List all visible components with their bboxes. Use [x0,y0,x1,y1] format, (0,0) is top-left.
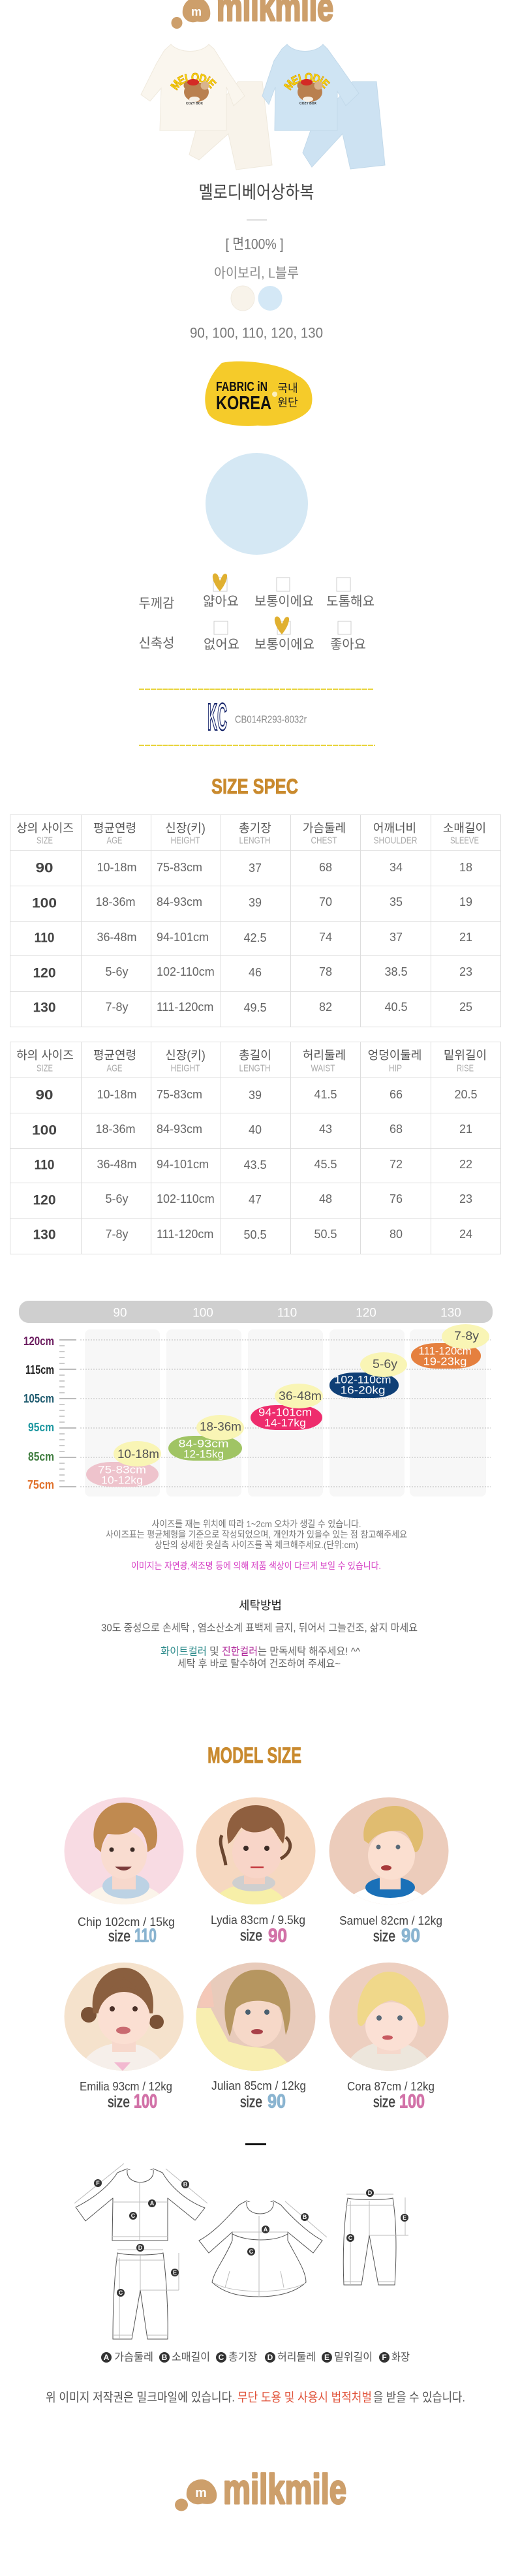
top table rows: 78 [319,965,332,978]
height axis labels: 120cm [23,1335,54,1348]
washing instructions: 세탁방법 [239,1599,282,1612]
bottom table rows: 40 [249,1123,262,1136]
top table rows: 40.5 [384,1001,408,1014]
copyright notice: 위 이미지 저작권은 밀크마일에 있습니다. [46,2390,235,2404]
colour names: 아이보리, L블루 [214,266,299,281]
bottom table header: SIZE [37,1063,53,1074]
bottom table rows: 120 [33,1193,56,1207]
top table rows [32,860,472,1016]
blue shirt [262,44,359,131]
diagram: long sleeve top: C [131,2212,136,2219]
top table rows: 23 [459,965,472,978]
top table header: SIZE [37,835,53,846]
top table rows: 19 [459,895,472,908]
bottom table header [16,1049,487,1074]
bottom table rows: 50.5 [243,1228,267,1241]
model: Samuel: size [373,1928,395,1945]
brand logo bottom: milkmile [223,2466,346,2513]
bottom table rows: 50.5 [314,1228,337,1241]
chart header bar: 100 [192,1307,213,1320]
bottom table rows: 80 [390,1228,403,1241]
bottom table rows: 72 [390,1158,403,1171]
measurement legend: 화장 [391,2351,410,2363]
fabric in korea badge: FABRIC iN [216,380,268,394]
model: Julian: 90 [268,2091,286,2112]
washing instructions: 세탁 후 바로 탈수하여 건조하여 주세요~ [177,1658,341,1669]
top table rows: 25 [459,1001,472,1014]
top table header: AGE [107,835,123,846]
diagram: long sleeve top: F [96,2180,100,2186]
diagram: leggings left [113,2244,179,2339]
diagram: leggings right: C [348,2235,353,2241]
top table rows: 102-110cm [157,965,215,978]
top table rows: 36-48m [97,931,137,944]
top table rows: 21 [459,931,472,944]
diagram: dress [199,2201,327,2297]
model: Emilia: size [108,2094,130,2111]
measurement legend: C [219,2353,224,2362]
bottom table rows: 21 [459,1123,472,1136]
size 100 marker: 18-36m [200,1420,241,1433]
bottom table rows: 43 [319,1123,332,1136]
bottom table header: RISE [457,1063,474,1074]
measurement legend: D [268,2353,273,2362]
top table rows: 68 [319,861,332,874]
bottom table rows: 111-120cm [157,1228,213,1241]
top table header: 가슴둘레 [303,822,346,835]
top table rows: 94-101cm [157,931,209,944]
top table rows: 120 [33,966,56,980]
bottom table rows: 36-48m [97,1158,137,1171]
copyright notice: 무단 도용 및 사용시 법적처벌 [237,2390,372,2404]
stretch row: 보통이에요 [254,637,314,652]
washing instructions [101,1599,418,1669]
model: Samuel [329,1797,449,1946]
size 130 marker [411,1324,489,1369]
copyright notice [46,2390,465,2404]
heading: model size: MODEL SIZE [207,1743,301,1768]
top table rows: 39 [249,896,262,909]
top table header: CHEST [311,835,337,846]
diagram: dress: B [303,2214,307,2220]
fabric swatch circle [206,453,308,555]
thickness row [138,573,375,611]
size 100 marker: 12-15kg [183,1448,224,1461]
ivory shirt bear print [170,73,217,106]
size 120 marker [329,1352,407,1398]
bottom table rows: 23 [459,1192,472,1205]
top table rows: 37 [249,861,262,875]
bottom table rows: 130 [33,1227,56,1243]
stretch row: 없어요 [204,637,239,652]
blue shirt bear print [283,73,330,106]
fabric in korea badge: 국내 [277,382,298,394]
bottom table header: 허리둘레 [303,1049,346,1062]
height axis labels [23,1335,54,1491]
bottom table header: WAIST [311,1063,335,1074]
washing instructions: 30도 중성으로 손세탁 , 염소산소계 표백제 금지, 뒤어서 그늘건조, 삶지 마세요 [101,1622,418,1634]
product photo: ivory set [141,44,273,170]
diagram: leggings right: E [403,2214,406,2221]
top table rows: 34 [390,861,403,874]
top table rows: 82 [319,1001,332,1014]
bottom table rows: 90 [35,1087,54,1103]
top table rows: 42.5 [243,931,267,944]
diagram: long sleeve top: A [150,2200,155,2207]
diagram: leggings right: D [368,2190,373,2196]
bottom table rows: 5-6y [105,1192,129,1205]
bottom table rows: 41.5 [314,1088,337,1101]
top table rows: 10-18m [97,861,137,874]
bottom table rows: 39 [249,1089,262,1102]
bottom table rows: 100 [32,1123,57,1138]
model: Lydia: Lydia 83cm / 9.5kg [211,1914,305,1927]
model: Chip: Chip 102cm / 15kg [78,1916,175,1929]
size 120 marker: 102-110cm [334,1373,391,1386]
model: Cora: size [373,2094,395,2111]
bottom table rows: 45.5 [314,1158,337,1171]
top table rows: 111-120cm [157,1001,213,1014]
top table header: 상의 사이즈 [16,822,74,835]
blue pants [303,82,385,169]
brand logo top [171,0,333,29]
model: Cora: 100 [399,2091,425,2112]
washing instructions: 는 만독세탁 해주세요! ^^ [258,1646,360,1658]
bottom table rows: 102-110cm [157,1192,215,1205]
size list: 90, 100, 110, 120, 130 [190,325,323,341]
size 90 marker: 10-12kg [101,1474,143,1487]
diagram: dress: A [264,2226,268,2233]
bottom table rows [32,1087,478,1243]
thickness row: 얇아요 [203,594,239,609]
bottom table header: 총길이 [239,1049,271,1062]
measurement legend: 소매길이 [172,2351,210,2363]
bottom table rows: 18-36m [95,1123,136,1136]
heart check mark [275,616,289,634]
measurement legend: 밑위길이 [334,2351,373,2363]
diagram: long sleeve top [74,2164,207,2241]
size notes: 사이즈를 재는 위치에 따라 1~2cm 오차가 생길 수 있습니다. [151,1519,361,1529]
bottom table rows: 43.5 [243,1158,267,1172]
model: Emilia [64,1963,184,2112]
top table rows: 49.5 [243,1001,267,1014]
model: Chip [64,1797,184,1946]
top table header [16,822,486,846]
top table rows: 70 [319,895,332,908]
top size table [10,815,501,1027]
size 110 marker: 14-17kg [264,1416,306,1429]
bottom table rows: 24 [459,1228,472,1241]
size 110 marker: 94-101cm [258,1406,312,1419]
product photo: blue set [262,44,385,170]
top table header: LENGTH [239,835,270,846]
top table header: 총기장 [239,822,271,835]
top table header: SLEEVE [450,835,479,846]
KC certification: KC [207,696,227,739]
top table rows: 7-8y [105,1001,129,1014]
model: Lydia: size [240,1927,262,1945]
top table rows: 84-93cm [157,895,202,908]
bottom table rows: 84-93cm [157,1123,202,1136]
washing instructions: 및 [209,1646,219,1658]
ivory shirt bear print: MELODiE [170,73,217,91]
fabric in korea badge: 원단 [277,397,298,409]
bottom table header: 신장(키) [165,1049,206,1062]
height axis labels: 95cm [28,1421,54,1434]
diagram: leggings left: C [119,2289,123,2296]
bottom table rows: 68 [390,1123,403,1136]
top table rows: 35 [390,895,403,908]
size 100 marker [168,1415,244,1461]
top table rows: 75-83cm [157,861,202,874]
diagram: leggings right [343,2189,408,2285]
thickness row: 보통이에요 [254,594,314,609]
measurement legend: B [162,2353,168,2362]
model: Julian: size [240,2094,262,2111]
bottom table header: HEIGHT [171,1063,200,1074]
top table rows: 130 [33,1000,56,1016]
model: Emilia: Emilia 93cm / 12kg [80,2080,172,2093]
top table rows: 18 [459,861,472,874]
measurement legend: A [104,2353,110,2362]
diagram: leggings left: D [138,2244,143,2251]
blue shirt bear print: COZY BOX [299,102,317,106]
fabric in korea badge [205,362,312,426]
model: Lydia [196,1797,316,1946]
bottom table header: LENGTH [239,1063,270,1074]
model: Samuel: 90 [401,1925,420,1946]
top table header: 어깨너비 [373,822,416,835]
model: Emilia: 100 [134,2091,157,2112]
blue shirt bear print: MELODiE [283,73,330,91]
size 90 marker [86,1441,161,1487]
measurement legend: E [324,2353,329,2362]
measurement legend [101,2351,410,2363]
bottom table rows: 48 [319,1192,332,1205]
height axis labels: 75cm [27,1478,54,1491]
bottom table rows: 10-18m [97,1088,137,1101]
size 130 marker: 19-23kg [423,1355,467,1368]
model: Samuel: Samuel 82cm / 12kg [339,1914,442,1927]
model: Lydia: 90 [268,1925,287,1946]
heart check mark [213,573,227,591]
fabric in korea badge: KOREA [216,393,271,414]
fabric feel checklist [138,573,375,652]
top table header: HEIGHT [171,835,200,846]
top table rows: 100 [32,895,57,911]
model: Julian: Julian 85cm / 12kg [211,2079,306,2092]
size 110 marker: 36-48m [279,1389,322,1403]
chart header bar [19,1301,493,1323]
top table header: 신장(키) [165,822,206,835]
model: Cora [329,1963,449,2112]
product name: 멜로디베어상하복 [198,183,314,202]
size notes [106,1519,407,1550]
top table header: 소매길이 [443,822,486,835]
model: Julian [196,1963,316,2112]
measurement legend: F [382,2353,387,2362]
diagram: leggings left: E [173,2269,177,2276]
size notes: 사이즈표는 평균체형을 기준으로 작성되었으며, 개인차가 있을수 있는 점 참고해주세요 [106,1529,407,1540]
top table rows: 74 [319,931,332,944]
size 120 marker: 5-6y [373,1358,397,1371]
height axis labels: 85cm [28,1450,54,1463]
top table rows: 90 [35,860,54,876]
colour swatches [231,286,282,311]
size 130 marker: 7-8y [454,1329,479,1342]
KC certification [207,696,307,739]
model: Chip: size [108,1928,130,1945]
chart header bar: 130 [440,1307,461,1320]
chart header bar: 110 [277,1307,297,1320]
measurement legend: 가슴둘레 [114,2351,153,2363]
bottom table rows: 76 [390,1192,403,1205]
bottom table rows: 47 [249,1193,262,1206]
bottom table header: 엉덩이둘레 [368,1049,421,1062]
bottom table header: 평균연령 [93,1049,136,1062]
bottom table rows: 20.5 [454,1088,478,1101]
stretch row [138,616,366,652]
size 90 marker: 75-83cm [98,1463,146,1476]
bottom table header: AGE [107,1063,123,1074]
bottom table rows: 110 [34,1158,55,1172]
KC certification: CB014R293-8032r [235,714,307,726]
size chart [19,1301,493,1497]
diagram: long sleeve top: B [183,2181,188,2188]
size 100 marker: 84-93cm [179,1437,228,1450]
fabric composition: [ 면100% ] [226,236,283,252]
top table header: SHOULDER [373,835,418,846]
bottom table rows: 75-83cm [157,1088,202,1101]
colour disclaimer: 이미지는 자연광,색조명 등에 의해 제품 색상이 다르게 보일 수 있습니다. [131,1560,381,1571]
top table rows: 5-6y [105,965,129,978]
copyright notice: 을 받을 수 있습니다. [373,2390,465,2404]
bottom table header: 밑위길이 [444,1049,487,1062]
size 110 marker [251,1384,323,1430]
bottom table header: 하의 사이즈 [16,1049,74,1062]
thickness row: 도톰해요 [326,594,375,609]
size 120 marker: 16-20kg [341,1384,385,1397]
brand logo bottom [175,2466,346,2513]
top table header: 평균연령 [93,822,136,835]
height axis labels: 105cm [23,1392,54,1405]
washing instructions: 화이트컬러 [161,1646,207,1658]
measurement legend: 허리둘레 [277,2351,316,2363]
size 130 marker: 111-120cm [419,1344,471,1358]
stretch row: 신축성 [138,636,175,651]
top table rows: 46 [249,966,262,979]
top table rows: 110 [34,931,55,945]
size notes: 상단의 상세한 옷실측 사이즈를 꼭 체크해주세요.(단위:cm) [155,1540,358,1550]
brand logo top: m [191,5,202,18]
bottom table header: HIP [389,1063,402,1074]
top table rows: 38.5 [384,965,408,978]
measurement legend: 총기장 [228,2351,257,2363]
ivory shirt [141,44,245,131]
bottom table rows: 66 [390,1088,403,1101]
bottom table rows: 94-101cm [157,1158,209,1171]
diagram: dress: C [249,2248,254,2255]
ivory shirt bear print: COZY BOX [186,102,204,106]
measurement diagrams [74,2164,408,2339]
chart header bar: 120 [356,1307,376,1320]
thickness row: 두께감 [138,596,175,611]
model: Cora: Cora 87cm / 12kg [347,2080,435,2093]
heading: size spec: SIZE SPEC [211,775,298,798]
chart header bar: 90 [113,1307,127,1320]
top table rows: 37 [390,931,403,944]
ivory pants [189,82,272,170]
bottom table rows: 22 [459,1158,472,1171]
model: Chip: 110 [134,1925,157,1946]
brand logo bottom: m [195,2486,207,2500]
stretch row: 좋아요 [330,637,366,652]
size 90 marker: 10-18m [117,1448,159,1461]
top table rows: 18-36m [95,895,136,908]
height axis labels: 115cm [25,1363,54,1376]
bottom size table [10,1042,501,1254]
washing instructions: 진한컬러 [222,1646,258,1658]
bottom table rows: 7-8y [105,1228,129,1241]
